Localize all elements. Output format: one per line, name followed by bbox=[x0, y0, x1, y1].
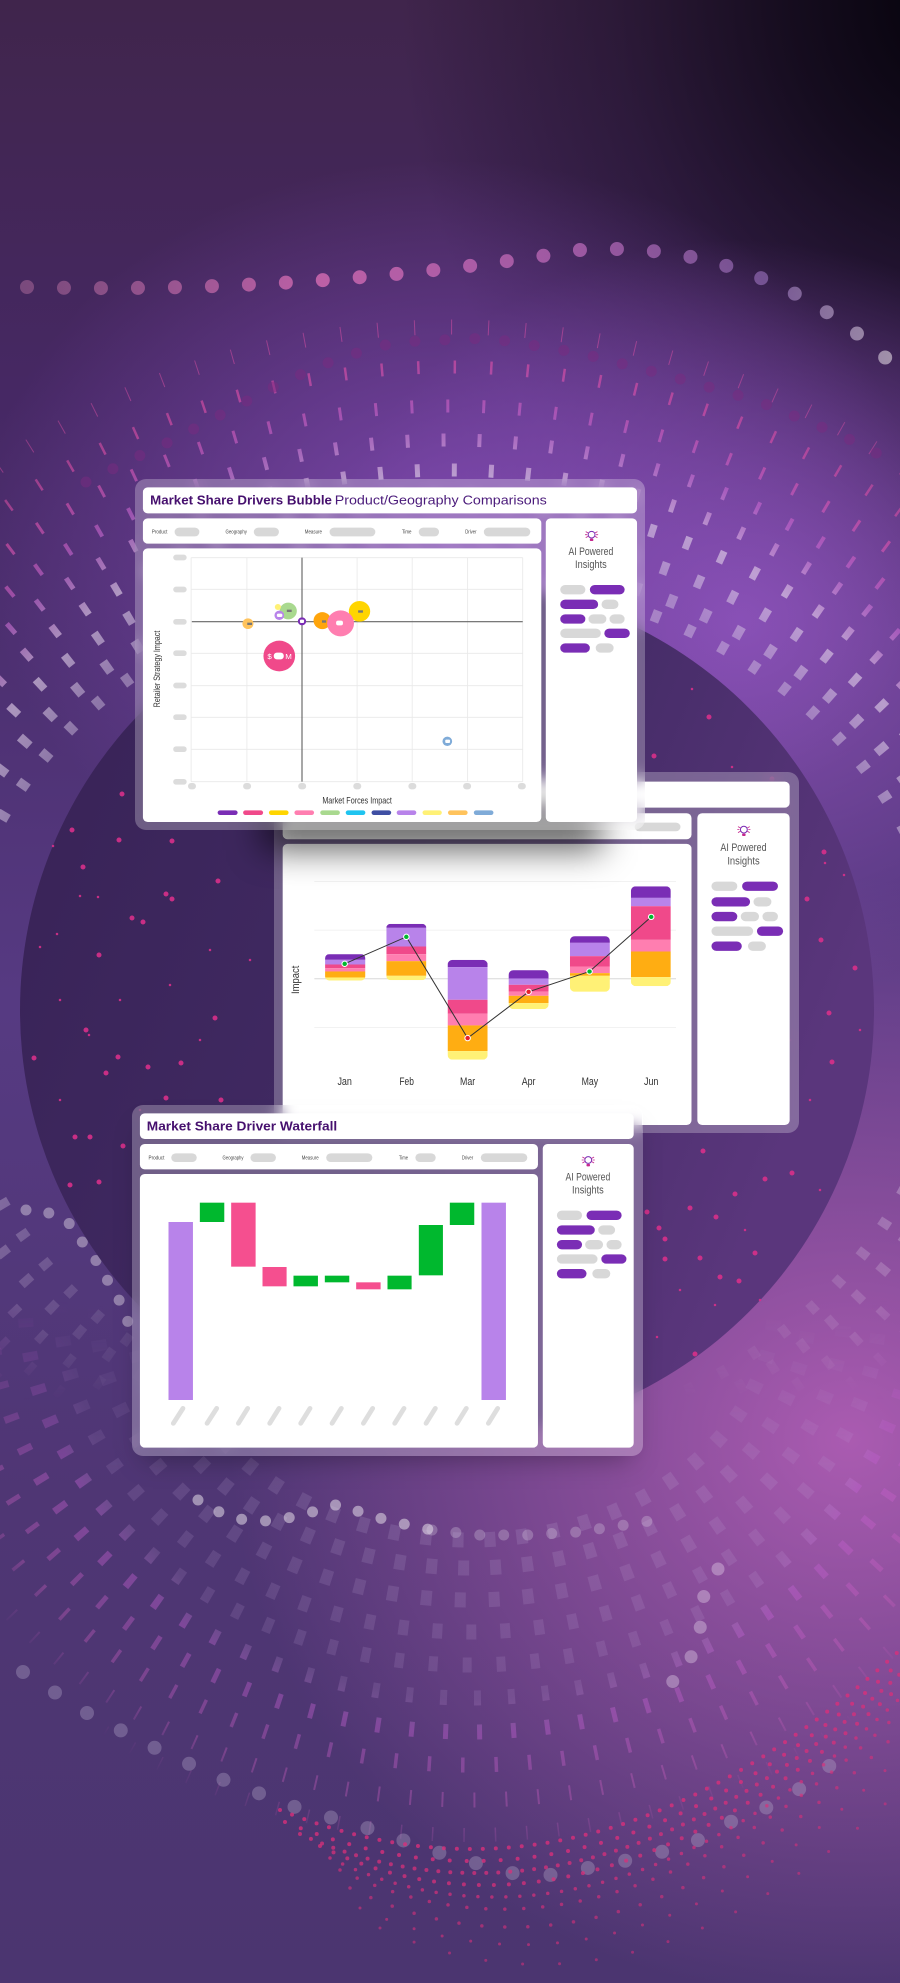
y axis label: Impact bbox=[290, 966, 303, 994]
insights heading bbox=[566, 1172, 611, 1197]
filter bar bbox=[142, 518, 541, 544]
chart area bbox=[142, 548, 541, 822]
axis tick slashes bbox=[174, 1408, 498, 1423]
y axis label: Retailer Strategy Impact bbox=[152, 630, 162, 707]
filter bar: Measure bbox=[304, 530, 322, 536]
filter bar: Time bbox=[399, 1155, 409, 1161]
insights heading bbox=[721, 842, 767, 868]
title bar: Market Share Driver Waterfall bbox=[147, 1119, 338, 1133]
insights panel bbox=[698, 813, 790, 1125]
title bar bbox=[142, 487, 637, 513]
insights panel bbox=[543, 1144, 634, 1448]
insights heading: Insights bbox=[575, 559, 607, 571]
bubbles bbox=[242, 601, 452, 746]
panel: waterfall dashboard bbox=[132, 1105, 643, 1456]
legend pills bbox=[217, 810, 493, 815]
bubbles: $ bbox=[267, 652, 272, 661]
month labels: Feb bbox=[400, 1076, 414, 1088]
filter bar: Driver bbox=[465, 530, 476, 536]
filter bar: Measure bbox=[302, 1155, 319, 1161]
insights heading: AI Powered bbox=[721, 842, 767, 854]
insights heading: Insights bbox=[572, 1185, 604, 1197]
insights panel bbox=[545, 518, 637, 822]
icon: light bulb bbox=[585, 531, 598, 541]
chart area bbox=[140, 1174, 538, 1448]
insight pills bbox=[712, 882, 784, 951]
filter bar: Product bbox=[149, 1155, 165, 1161]
pink speckle dots on circle bbox=[34, 689, 860, 1354]
stacked bar chart bbox=[290, 882, 676, 1088]
month labels: Apr bbox=[522, 1076, 536, 1088]
title bar: Product/Geography Comparisons bbox=[334, 493, 547, 508]
panel: monthly impact stacked bars bbox=[274, 772, 799, 1133]
filter bar: Geography bbox=[225, 530, 247, 536]
month labels: Jun bbox=[644, 1076, 659, 1088]
bubble chart bbox=[152, 555, 525, 815]
insight pills bbox=[557, 1211, 627, 1278]
filter bar bbox=[283, 813, 692, 839]
title bar bbox=[283, 782, 790, 808]
insights heading bbox=[568, 546, 613, 571]
month labels bbox=[338, 1076, 659, 1088]
x axis label: Market Forces Impact bbox=[322, 795, 392, 805]
month labels: Jan bbox=[338, 1076, 352, 1088]
title bar: Market Share Drivers Bubble bbox=[150, 493, 332, 508]
filter bar: Product bbox=[151, 530, 167, 536]
insight pills bbox=[560, 585, 629, 653]
title bar bbox=[140, 1113, 634, 1139]
icon: light bulb bbox=[582, 1157, 595, 1166]
insights heading: AI Powered bbox=[568, 546, 613, 558]
filter bar: Driver bbox=[462, 1155, 474, 1161]
shadow: bubble panel cast onto stacked bar panel bbox=[262, 806, 602, 850]
icon: light bulb bbox=[738, 826, 751, 836]
bars bbox=[325, 886, 671, 1060]
insights heading: Insights bbox=[728, 856, 760, 868]
waterfall chart bbox=[169, 1203, 506, 1423]
insights heading: AI Powered bbox=[566, 1172, 611, 1184]
month labels: Mar bbox=[460, 1076, 476, 1088]
bubbles: M bbox=[285, 652, 291, 661]
panel: bubble chart dashboard bbox=[134, 479, 645, 830]
filter bar: Time bbox=[401, 530, 411, 536]
filter bar: Geography bbox=[223, 1155, 244, 1161]
filter bar bbox=[140, 1144, 538, 1169]
chart area bbox=[283, 844, 692, 1125]
month labels: May bbox=[582, 1076, 599, 1088]
axis tick pills bbox=[173, 555, 525, 789]
trend line with markers bbox=[342, 914, 654, 1041]
large dark circle bbox=[20, 583, 874, 1437]
